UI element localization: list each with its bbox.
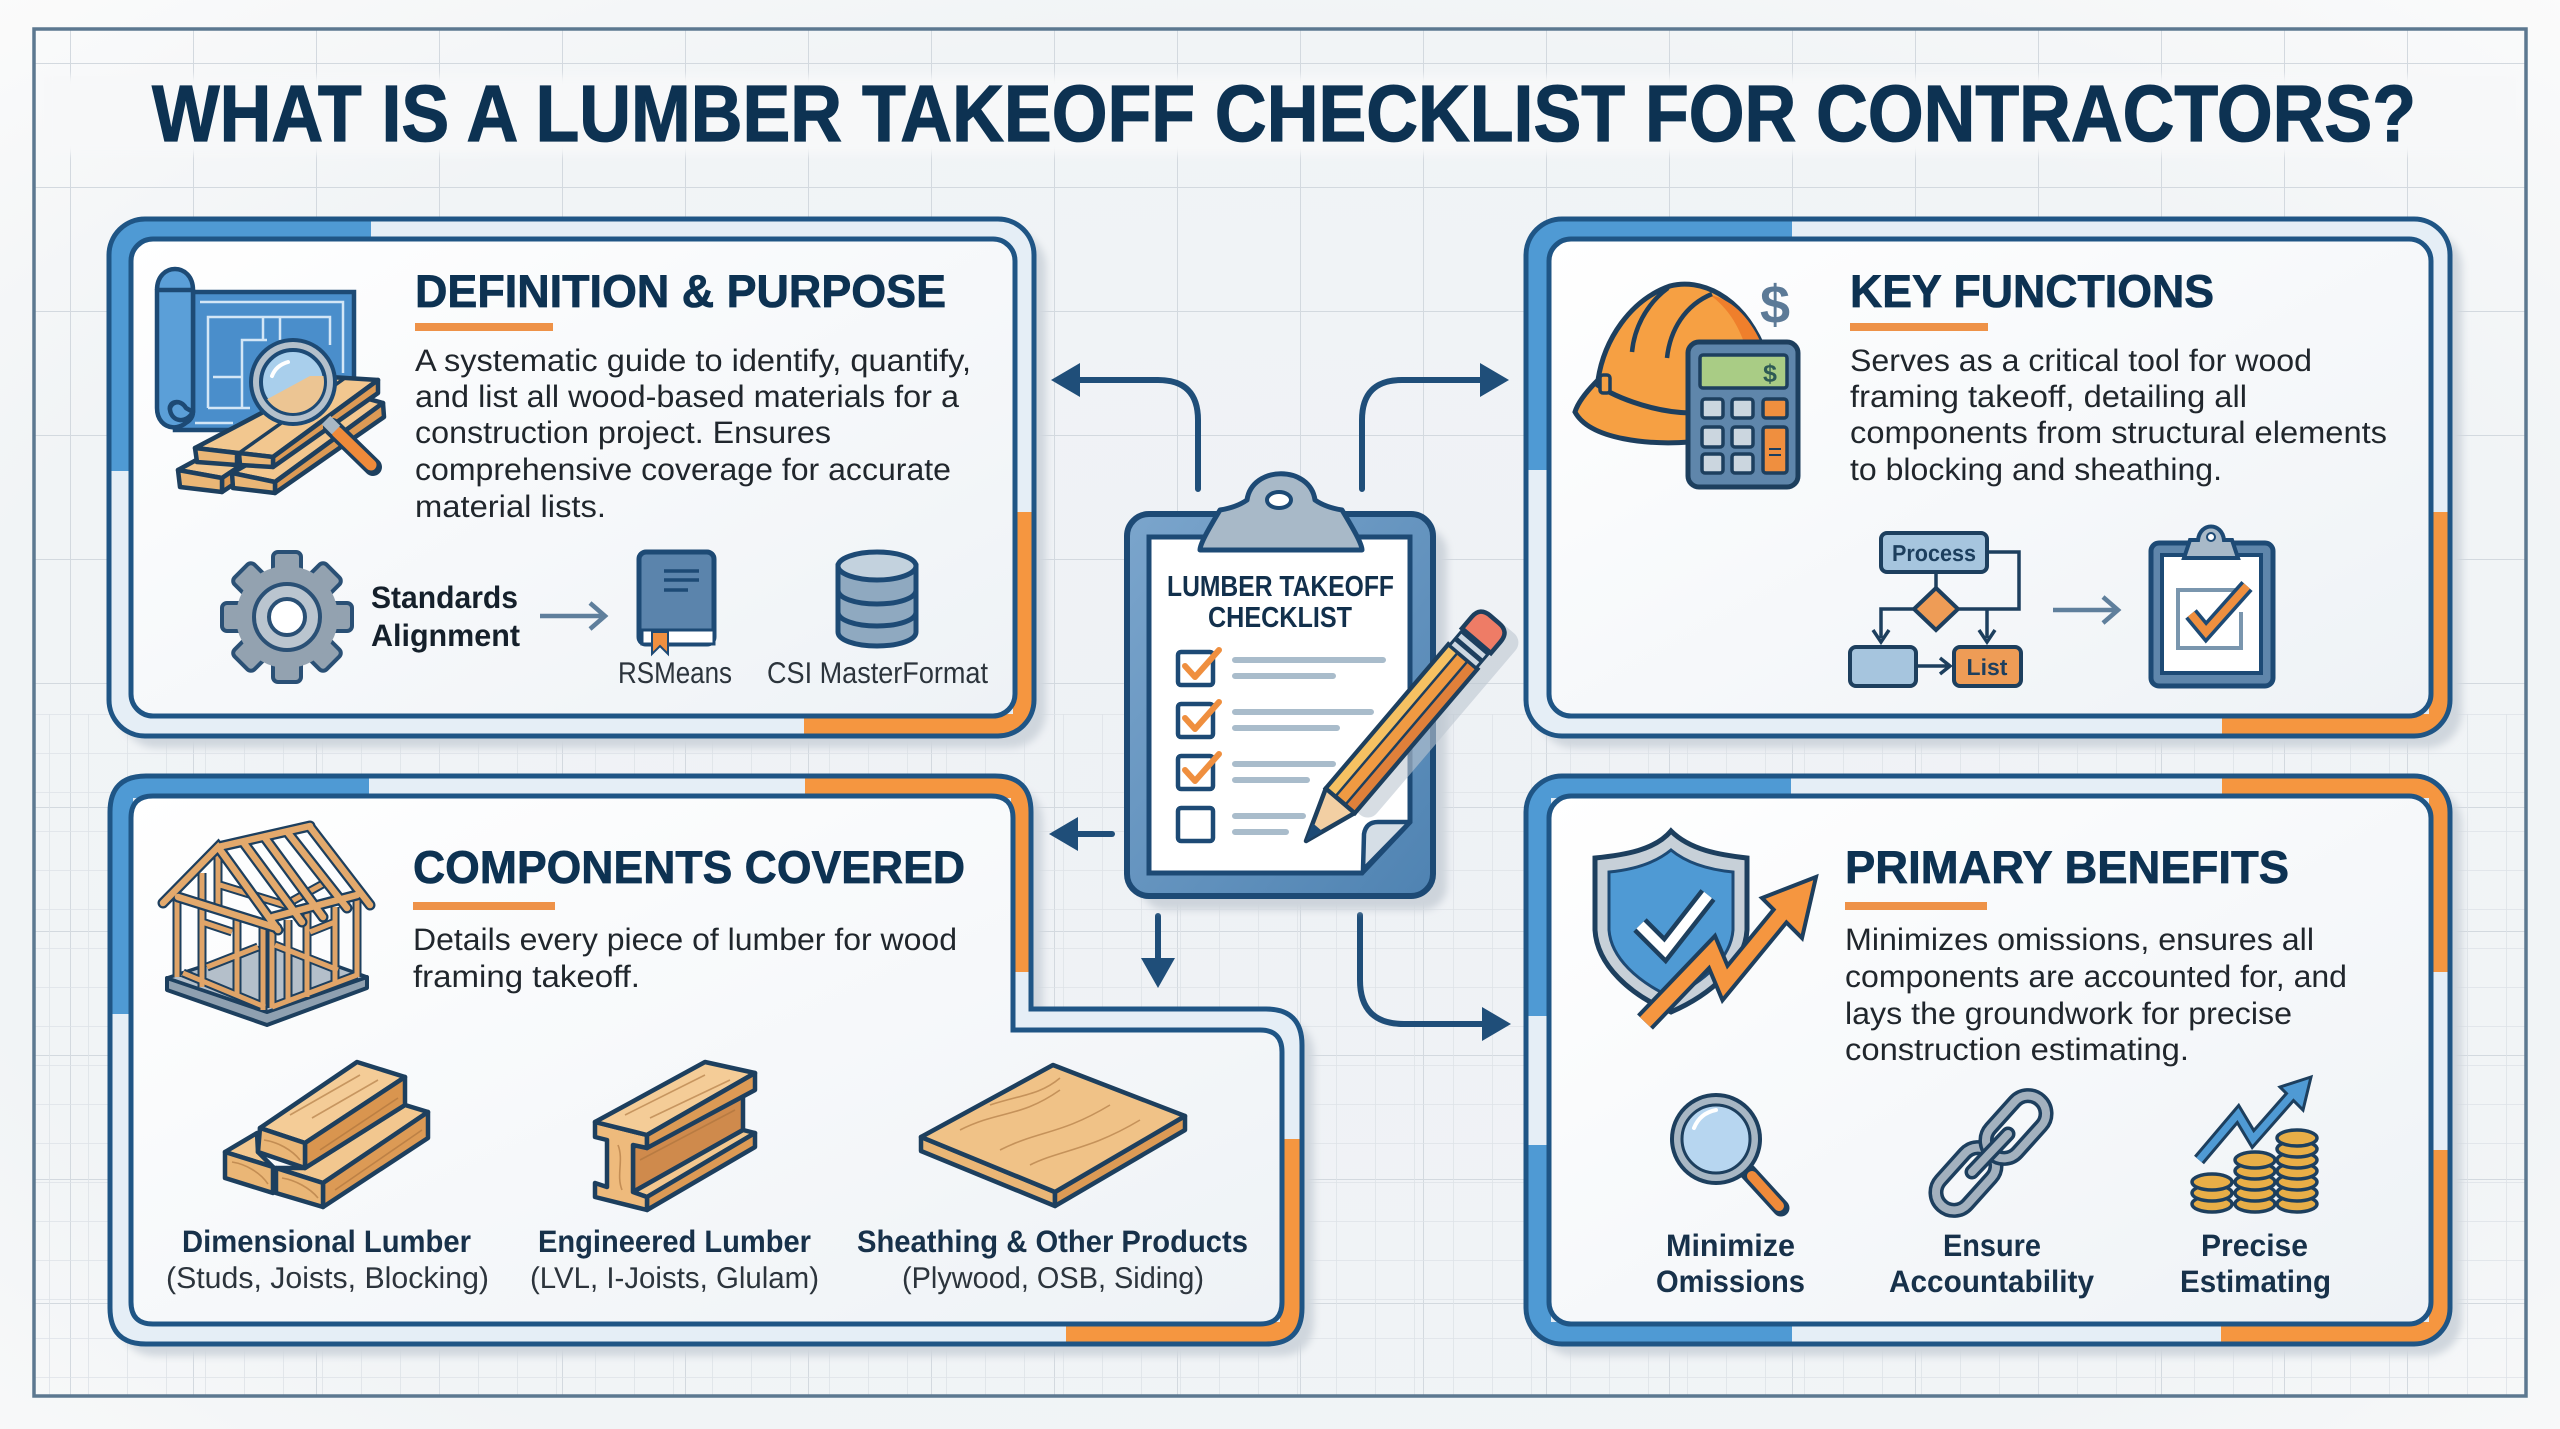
body text: framing takeoff. — [413, 959, 640, 994]
label: dimensional lumber — [166, 1224, 489, 1295]
icon: calculator: $ — [1763, 360, 1777, 388]
body text — [1845, 922, 2347, 1067]
arrow: checklist to components, left — [1049, 817, 1112, 851]
clipboard title: LUMBER TAKEOFF — [1167, 571, 1394, 603]
pencil — [1292, 606, 1523, 864]
accent underline — [415, 323, 553, 331]
clip — [1200, 474, 1362, 550]
icon: chain — [1929, 1088, 2053, 1218]
body text: material lists. — [415, 489, 606, 524]
body text: comprehensive coverage for accurate — [415, 452, 951, 487]
label: engineered lumber: (LVL, I-Joists, Glulam) — [530, 1262, 819, 1295]
body text: A systematic guide to identify, quantify, — [415, 343, 971, 378]
icon: small clipboard — [2151, 526, 2273, 686]
panel: definition and purpose — [109, 219, 1046, 748]
arrow: checklist to components, down — [1141, 916, 1175, 988]
flowchart: Process — [1892, 540, 1976, 566]
body text — [413, 922, 957, 994]
body text — [415, 343, 971, 524]
panel: primary benefits — [1526, 776, 2462, 1356]
label: engineered lumber — [530, 1224, 819, 1295]
body text: components from structural elements — [1850, 415, 2387, 450]
label: dimensional lumber: Dimensional Lumber — [182, 1224, 471, 1259]
standards alignment label: Alignment — [371, 618, 520, 653]
RSMeans label: RSMeans — [618, 657, 732, 690]
accent underline — [413, 902, 555, 910]
icon: blueprint, lumber and magnifier — [157, 269, 384, 493]
central clipboard — [1127, 474, 1523, 910]
body text: and list all wood-based materials for a — [415, 379, 960, 414]
icon: calculator — [1688, 342, 1798, 487]
label: precise estimating — [2180, 1228, 2331, 1299]
heading: primary benefits: PRIMARY BENEFITS — [1845, 841, 2289, 893]
icon: book — [639, 552, 714, 654]
icon: shield with growth arrow — [1595, 831, 1816, 1022]
icon: dimensional lumber — [225, 1062, 428, 1207]
body text: to blocking and sheathing. — [1850, 452, 2222, 487]
label: minimize omissions: Omissions — [1656, 1264, 1805, 1299]
label: sheathing and other products: Sheathing & Other Products — [857, 1224, 1248, 1259]
arrow: flowchart to clipboard — [2053, 597, 2118, 623]
body text: components are accounted for, and — [1845, 959, 2347, 994]
body text: construction project. Ensures — [415, 415, 831, 450]
icon: coins with rising arrow — [2192, 1077, 2317, 1212]
body text — [1850, 343, 2387, 487]
heading: definition and purpose: DEFINITION & PURPOSE — [415, 265, 946, 317]
body text: Minimizes omissions, ensures all — [1845, 922, 2314, 957]
icon: house frame — [163, 826, 370, 1025]
label: ensure accountability: Ensure — [1943, 1228, 2041, 1263]
arrow: standards to references — [540, 603, 605, 629]
standards alignment label — [371, 580, 520, 653]
label: sheathing and other products: (Plywood, OSB, Siding) — [902, 1262, 1204, 1295]
icon: hard hat — [1575, 284, 1762, 443]
flowchart: List — [1967, 654, 2008, 680]
clipboard title: CHECKLIST — [1208, 602, 1352, 634]
label: engineered lumber: Engineered Lumber — [538, 1224, 811, 1259]
icon: database — [838, 552, 916, 646]
label: ensure accountability: Accountability — [1889, 1264, 2095, 1299]
CSI MasterFormat label: CSI MasterFormat — [767, 657, 989, 690]
body text: Details every piece of lumber for wood — [413, 922, 957, 957]
panel: key functions — [1526, 219, 2462, 748]
label: precise estimating: Precise — [2201, 1228, 2308, 1263]
panel: components covered — [110, 776, 1314, 1356]
arrow: checklist to definition — [1051, 363, 1198, 489]
label: precise estimating: Estimating — [2180, 1264, 2331, 1299]
body text: construction estimating. — [1845, 1032, 2189, 1067]
heading: key functions: KEY FUNCTIONS — [1850, 265, 2214, 317]
clipboard title — [1167, 571, 1394, 634]
accent underline — [1845, 902, 1987, 910]
arrow: checklist to primary benefits — [1360, 915, 1511, 1041]
label: ensure accountability — [1889, 1228, 2095, 1299]
label: sheathing and other products — [857, 1224, 1248, 1295]
label: dimensional lumber: (Studs, Joists, Blocking) — [166, 1262, 489, 1295]
body text: Serves as a critical tool for wood — [1850, 343, 2312, 378]
icon: gear — [222, 552, 352, 682]
icon: sheathing panel — [921, 1065, 1185, 1206]
label: minimize omissions — [1656, 1228, 1805, 1299]
standards alignment label: Standards — [371, 580, 518, 615]
icon: engineered lumber — [595, 1062, 755, 1210]
body text: lays the groundwork for precise — [1845, 996, 2292, 1031]
accent underline — [1850, 323, 1988, 331]
label: minimize omissions: Minimize — [1666, 1228, 1795, 1263]
body text: framing takeoff, detailing all — [1850, 379, 2247, 414]
flowchart — [1850, 533, 2021, 686]
arrow: checklist to key functions — [1362, 363, 1509, 489]
icon: dollar sign: $ — [1760, 275, 1790, 335]
icon: magnifier — [1670, 1093, 1781, 1208]
heading: components covered: COMPONENTS COVERED — [413, 841, 965, 893]
page fold — [1363, 822, 1410, 870]
checklist rows — [1178, 650, 1383, 841]
